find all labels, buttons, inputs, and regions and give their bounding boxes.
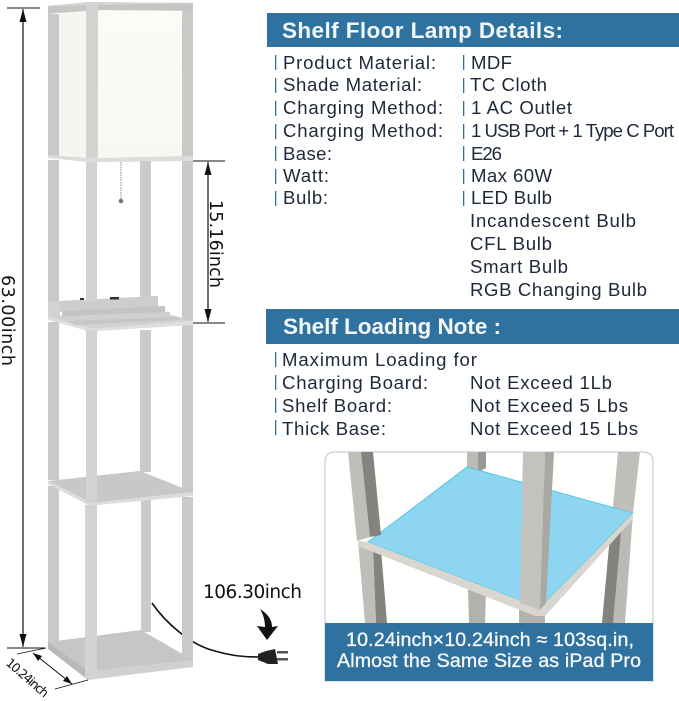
loading note list: Not Exceed 15 Lbs [470, 418, 638, 439]
card caption band [325, 623, 653, 681]
spec values: Smart Bulb [470, 256, 568, 277]
back posts [140, 161, 151, 632]
spec values: Incandescent Bulb [470, 210, 636, 231]
spec values: CFL Bulb [470, 233, 552, 254]
loading note list: Not Exceed 5 Lbs [470, 395, 628, 416]
loading note list [275, 349, 638, 439]
dimension: width 10.24inch [3, 648, 88, 700]
spec values: MDF [471, 52, 512, 73]
card background [325, 452, 653, 681]
spec labels: Product Material: [283, 52, 436, 73]
header: shelf floor lamp details [267, 13, 679, 47]
icon: curved arrow to plug [257, 609, 278, 640]
dimension: shelf height 15.16inch [193, 161, 225, 323]
pull chain [119, 162, 123, 203]
base [48, 630, 193, 680]
left and right posts [48, 160, 193, 662]
spec values: 1 USB Port + 1 Type C Port [471, 120, 675, 141]
spec labels [283, 52, 443, 208]
spec values: TC Cloth [470, 74, 547, 95]
shelf size card [325, 452, 653, 681]
spec values: LED Bulb [471, 187, 552, 208]
loading note list: Thick Base: [282, 418, 386, 439]
front post [85, 162, 97, 678]
lamp shade [48, 2, 193, 158]
loading note list: Charging Board: [282, 372, 428, 393]
card caption band: 10.24inch×10.24inch ≈ 103sq.in, [346, 629, 634, 651]
dimension: shelf height 15.16inch: 15.16inch [205, 200, 225, 288]
spec labels: Watt: [283, 165, 329, 186]
spec values: 1 AC Outlet [471, 97, 573, 118]
icon: plug [258, 649, 288, 664]
card caption band: Almost the Same Size as iPad Pro [337, 650, 641, 672]
spec labels: Bulb: [283, 187, 328, 208]
dimension: width 10.24inch: 10.24inch [3, 655, 52, 700]
spec labels: Charging Method: [283, 120, 443, 141]
spec values: E26 [471, 143, 502, 164]
loading note list: Shelf Board: [282, 395, 392, 416]
cable length label: 106.30inch [203, 582, 302, 603]
spec values: Max 60W [471, 165, 552, 186]
header: shelf loading note: Shelf Loading Note : [283, 314, 501, 339]
floor lamp illustration [48, 2, 260, 680]
specification list [275, 52, 675, 300]
dimension: height 63.00inch [0, 8, 45, 648]
spec labels: Shade Material: [283, 74, 422, 95]
spec labels: Charging Method: [283, 97, 443, 118]
header: shelf floor lamp details: Shelf Floor Lamp Details: [282, 18, 563, 43]
header: shelf loading note [266, 309, 679, 344]
power cable [152, 603, 260, 657]
spec values: RGB Changing Bulb [470, 279, 647, 300]
upper shelf [48, 155, 193, 162]
shelf close-up illustration [348, 452, 640, 623]
middle shelf [48, 471, 193, 505]
loading note list: Maximum Loading for [282, 349, 477, 370]
loading note list: Not Exceed 1Lb [470, 372, 612, 393]
spec values [470, 52, 675, 300]
charging shelf with stepped tray [48, 296, 193, 331]
spec labels: Base: [283, 143, 332, 164]
